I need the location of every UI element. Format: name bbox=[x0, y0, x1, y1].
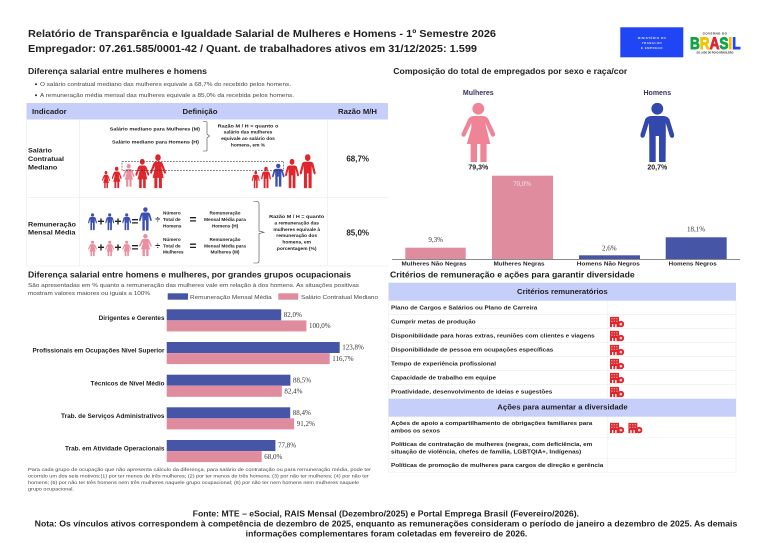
action rows: Políticas de contratação de mulheres (negras, com deficiência, em bbox=[391, 442, 592, 448]
formula: men: ÷ bbox=[155, 214, 160, 224]
group: Profissionais: 116,7% bbox=[332, 355, 354, 363]
action rows: Políticas de promoção de mulheres para cargos de direção e gerência bbox=[391, 463, 604, 469]
action rows bbox=[391, 421, 604, 469]
bar chart: composition: Mulheres Negras bbox=[494, 262, 544, 268]
legend: Remuneração Mensal Média bbox=[190, 295, 273, 301]
group: Técnicos bbox=[90, 375, 311, 397]
group: Profissionais: 123,8% bbox=[342, 344, 364, 352]
formula: men: + bbox=[114, 214, 122, 228]
definition: razão remuneração: remuneração dos bbox=[276, 233, 317, 239]
icon: mulheres 79,3%: Mulheres bbox=[463, 90, 494, 97]
footnote: ocorrido um dos seis motivos:(1) por ter menos de três mulheres; (2) por ter menos de três homens; (3) por não ter mulheres; (4) por não ter bbox=[28, 474, 369, 480]
row label: salário contratual mediano: Contratual bbox=[28, 156, 64, 163]
group: Dirigentes e Gerentes: Dirigentes e Gerentes bbox=[99, 315, 165, 322]
group: Dirigentes e Gerentes bbox=[99, 309, 331, 331]
row label: salário contratual mediano: Mediano bbox=[28, 165, 57, 172]
group: Dirigentes e Gerentes: 82,0% bbox=[284, 311, 302, 319]
definition: razão remuneração: Razão M / H = quanto bbox=[269, 214, 324, 220]
formula: men: Homens (H) bbox=[212, 223, 239, 228]
formula: women: Remuneração bbox=[209, 237, 241, 242]
criteria rows: Disponibilidade de pessoa em ocupações específicas bbox=[391, 347, 553, 353]
heading: critérios: Critérios de remuneração e ações para garantir diversidade bbox=[390, 269, 635, 279]
row label: salário contratual mediano bbox=[28, 147, 64, 172]
group: Operacionais: 68,0% bbox=[264, 453, 283, 461]
formula: women: Número bbox=[163, 237, 181, 242]
formula: men: = bbox=[131, 214, 139, 228]
heading: composição: Composição do total de empregados por sexo e raça/cor bbox=[393, 66, 628, 76]
group: Operacionais: Trab. em Atividade Operacionais bbox=[65, 446, 165, 453]
footnote: grupo ocupacional. bbox=[28, 487, 74, 493]
definition: razão remuneração: porcentagem (%) bbox=[277, 246, 317, 252]
title: Relatório de Transparência e Igualdade Salarial de Mulheres e Homens - 1º Semestre 2026 bbox=[28, 29, 496, 40]
formula: women: Mensal Média para bbox=[204, 243, 246, 248]
value: 85,0%: 85,0% bbox=[346, 228, 369, 238]
definition: salário mediano bbox=[110, 122, 278, 151]
row label: salário contratual mediano: Salário bbox=[28, 147, 52, 154]
footer source and note: Fonte: MTE – eSocial, RAIS Mensal (Dezembro/2025) e Portal Emprega Brasil (Fevereiro/2026). bbox=[193, 510, 579, 519]
footer source and note bbox=[35, 510, 738, 539]
text block: key findings: A remuneração média mensal das mulheres equivale a 85,0% da recebida pelos homens. bbox=[40, 93, 295, 99]
definition: razão remuneração: a remuneração das bbox=[274, 220, 319, 226]
formula: women bbox=[88, 234, 246, 256]
text block: chart description: mostram valores maiores ou iguais a 100% bbox=[28, 291, 150, 297]
definition: salário mediano: Salário mediano para Mulheres (M) bbox=[110, 127, 200, 133]
icon: men median figures bbox=[252, 154, 316, 188]
bar chart: composition: 2,6% bbox=[602, 244, 617, 252]
header: critérios remuneratórios bbox=[388, 283, 736, 301]
action rows: ambos os sexos bbox=[391, 428, 440, 434]
bar chart: composition: Mulheres Não Negras bbox=[402, 262, 466, 268]
text block: key findings bbox=[35, 82, 295, 99]
definition: salário mediano: salário das mulheres bbox=[224, 130, 273, 136]
criteria rows: Tempo de experiência profissional bbox=[391, 361, 496, 367]
logo: Ministério do Trabalho e Emprego: TRABALHO bbox=[642, 41, 662, 45]
action rows: situação de violência, chefes de família, LGBTQIA+, Indígenas) bbox=[391, 449, 581, 455]
definition: razão remuneração: mulheres equivale à bbox=[273, 227, 320, 233]
legend bbox=[168, 293, 378, 301]
icon: mulheres 79,3%: 79,3% bbox=[468, 164, 489, 171]
logo: Governo do Brasil: GOVERNO DO bbox=[703, 32, 728, 36]
formula: women: = bbox=[131, 241, 139, 255]
definition: salário mediano: homens, em % bbox=[231, 142, 266, 148]
icon: homens 20,7%: Homens bbox=[643, 90, 671, 97]
icon: women median figures bbox=[102, 154, 166, 188]
row label: remuneração mensal média: Remuneração bbox=[28, 221, 76, 228]
table header: Indicador bbox=[32, 109, 67, 116]
text block: key findings: O salário contratual mediano das mulheres equivale a 68,7% do recebido pelos homens. bbox=[40, 82, 292, 88]
formula: women: Total de bbox=[163, 243, 181, 248]
criteria rows bbox=[391, 305, 595, 395]
action rows: Ações de apoio a compartilhamento de obrigações familiares para bbox=[391, 421, 593, 427]
bar chart: composition: 18,1% bbox=[687, 225, 705, 233]
row label: remuneração mensal média bbox=[28, 221, 76, 236]
group: Operacionais bbox=[65, 440, 296, 462]
formula: women: Mulheres (M) bbox=[211, 250, 240, 255]
definition: salário mediano: equivale ao salário dos bbox=[221, 136, 275, 142]
logo: Governo do Brasil: BRASIL bbox=[690, 34, 740, 53]
group: Administrativos: 91,2% bbox=[297, 420, 315, 428]
group: Dirigentes e Gerentes: 100,0% bbox=[309, 322, 331, 330]
formula: men bbox=[88, 207, 246, 231]
definition: razão remuneração: homens, em bbox=[282, 240, 312, 246]
criteria rows: Cumprir metas de produção bbox=[391, 319, 476, 325]
text block: chart description: São apresentadas em % quanto a remuneração das mulheres vale em relação à dos homens. As situações positivas bbox=[28, 283, 359, 289]
formula: men: Número bbox=[163, 211, 181, 216]
criteria rows: Disponibilidade para horas extras, reuniões com clientes e viagens bbox=[391, 333, 595, 339]
icon: homens 20,7%: 20,7% bbox=[647, 164, 668, 171]
formula: women: Mulheres bbox=[163, 250, 184, 255]
bar chart: composition: Homens Negros bbox=[669, 262, 717, 268]
bar chart: composition: Homens Não Negros bbox=[577, 262, 640, 268]
logo: Ministério do Trabalho e Emprego bbox=[620, 27, 683, 57]
footer source and note: Nota: Os vínculos ativos correspondem à competência de dezembro de 2025, enquanto as remunerações consideram o período de janeiro a dezembro de 2025. As demais bbox=[35, 520, 738, 529]
formula: men: Remuneração bbox=[209, 211, 241, 216]
definition: razão remuneração bbox=[254, 202, 324, 263]
formula: men: Homens bbox=[163, 223, 182, 228]
logo: Ministério do Trabalho e Emprego: MINISTÉRIO DO bbox=[638, 35, 666, 40]
group: Operacionais: 77,8% bbox=[278, 442, 296, 450]
definition: salário mediano: Salário mediano para Homens (H) bbox=[112, 139, 199, 145]
group: Administrativos: 88,4% bbox=[293, 409, 311, 417]
title bbox=[28, 29, 496, 55]
group: Profissionais: Profissionais em Ocupações Nível Superior bbox=[32, 348, 165, 355]
text block: chart description bbox=[28, 283, 359, 297]
header: critérios remuneratórios: Critérios remuneratórios bbox=[517, 289, 608, 296]
icon: homens 20,7% bbox=[640, 90, 674, 171]
icon: mulheres 79,3% bbox=[461, 90, 495, 171]
row label: remuneração mensal média: Mensal Média bbox=[28, 230, 76, 236]
formula: women: = bbox=[189, 239, 197, 253]
panel: indicators table bbox=[26, 103, 388, 266]
heading: grupos ocupacionais: Diferença salarial entre homens e mulheres, por grandes grupos ocupacionais bbox=[28, 269, 351, 279]
logo: Ministério do Trabalho e Emprego: E EMPREGO bbox=[641, 46, 663, 50]
footnote: Para cada grupo de ocupação que não apresenta cálculo da diferença, para salário de contratação ou para remuneração média, pode ter bbox=[28, 467, 371, 473]
header: ações para aumentar a diversidade bbox=[388, 399, 736, 417]
criteria rows: Capacidade de trabalho em equipe bbox=[391, 375, 496, 381]
group: Técnicos: 88,5% bbox=[293, 376, 311, 384]
group: Técnicos: Técnicos de Nível Médio bbox=[90, 380, 165, 387]
table header: Razão M/H bbox=[338, 109, 377, 116]
formula: men: Mensal Média para bbox=[204, 217, 246, 222]
table header bbox=[26, 103, 388, 120]
icons: company criteria bbox=[610, 317, 623, 397]
criteria rows: Plano de Cargos e Salários ou Plano de Carreira bbox=[391, 305, 538, 311]
value: 68,7%: 68,7% bbox=[346, 154, 369, 164]
title: Empregador: 07.261.585/0001-42 / Quant. de trabalhadores ativos em 31/12/2025: 1.599 bbox=[28, 44, 477, 55]
heading: diferença salarial: Diferença salarial entre mulheres e homens bbox=[28, 66, 207, 76]
footer source and note: informações complementares foram coletadas em fevereiro de 2026. bbox=[246, 530, 527, 539]
definition: salário mediano: Razão M / H = quanto o bbox=[218, 123, 278, 129]
bar chart: composition bbox=[392, 176, 740, 268]
legend: Salário Contratual Mediano bbox=[301, 295, 378, 301]
logo: Governo do Brasil: DO LADO DO POVO BRASILEIRO bbox=[697, 52, 734, 54]
formula: men: + bbox=[97, 214, 105, 228]
formula: women: ÷ bbox=[155, 241, 160, 251]
criteria rows: Proatividade, desenvolvimento de ideias e sugestões bbox=[391, 389, 552, 395]
panel: criteria table bbox=[388, 283, 736, 472]
footnote: homens; (5) por não ter três homens nem três mulheres naquele grupo ocupacional; (6) por não ter nem homens nem mulheres naquele bbox=[28, 480, 359, 486]
icons: company actions bbox=[610, 423, 642, 433]
group: Profissionais bbox=[32, 342, 364, 364]
group: Administrativos: Trab. de Serviços Administrativos bbox=[61, 413, 165, 420]
footnote bbox=[28, 467, 371, 493]
formula: women: + bbox=[97, 241, 105, 255]
header: ações para aumentar a diversidade: Ações para aumentar a diversidade bbox=[497, 404, 628, 412]
formula: women: + bbox=[114, 241, 122, 255]
group: Técnicos: 82,4% bbox=[284, 388, 303, 396]
bar chart: occupational groups bbox=[32, 309, 364, 462]
table header: Definição bbox=[182, 109, 218, 116]
group: Administrativos bbox=[61, 407, 315, 429]
formula: men: = bbox=[189, 212, 197, 226]
bar chart: composition: 70,0% bbox=[513, 180, 531, 188]
formula: men: Total de bbox=[163, 217, 181, 222]
bar chart: composition: 9,3% bbox=[428, 236, 443, 244]
